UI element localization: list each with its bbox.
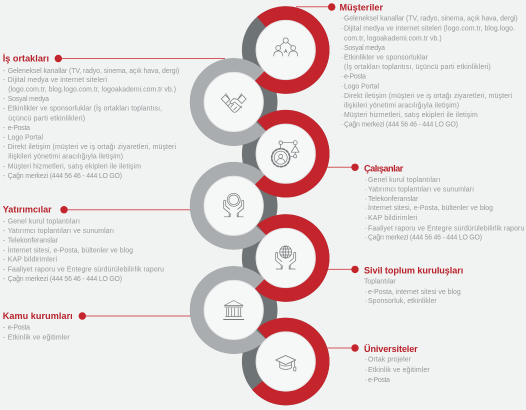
list: - (3, 238, 5, 245)
list: e-Posta (344, 74, 366, 81)
list: Telekonferanslar (368, 196, 419, 203)
list: Etkinlikler ve sponsorluklar (344, 55, 429, 62)
list: Çağrı merkezi (444 56 46 - 444 LO GO) (8, 173, 122, 180)
list: Geleneksel kanallar (TV, radyo, sinema, açık hava, dergi) (344, 16, 518, 23)
icon: government building (224, 300, 244, 320)
list (3, 325, 70, 342)
list: ilişkileri yönetimi aracılığıyla iletişim) (8, 154, 123, 161)
list: · (365, 215, 367, 222)
list: - (3, 125, 5, 132)
list: Etkinlikler ve sponsorluklar (İş ortakları toplantısı, (8, 104, 162, 113)
list (365, 177, 524, 242)
list: İnternet sitesi, e-Posta, bültenler ve blog (368, 203, 493, 212)
heading: İş ortakları (3, 54, 49, 64)
list: - (3, 267, 5, 274)
list: Logo Portal (8, 135, 43, 142)
list: Yatırımcı toplantıları ve sunumları (8, 228, 114, 235)
list: İnternet sitesi, e-Posta, bültenler ve blog (8, 245, 133, 254)
list: · (365, 377, 367, 384)
list: - (3, 325, 5, 332)
list (341, 16, 518, 129)
list: - (3, 173, 5, 180)
list: - (3, 247, 5, 254)
list: Ortak projeler (368, 357, 412, 364)
list: Çağrı merkezi (444 56 46 - 444 LO GO) (368, 235, 482, 242)
connector lines (58, 7, 355, 348)
icon: graduation cap (276, 356, 296, 371)
list: · (341, 74, 343, 81)
marker dot (328, 3, 335, 11)
list: - (3, 257, 5, 264)
list: Toplantılar (364, 279, 396, 286)
list: - (3, 144, 5, 151)
list: · (341, 16, 343, 23)
list: · (341, 112, 343, 119)
list: (İş ortakları toplantısı, üçüncü parti etkinlikleri) (344, 62, 491, 71)
list: Sosyal medya (8, 96, 49, 103)
icon: hands holding globe (276, 246, 296, 269)
list: üçüncü parti etkinlikleri) (8, 115, 85, 122)
marker dot (351, 164, 359, 171)
list: · (365, 225, 367, 232)
list: · (341, 55, 343, 62)
heading: Müşteriler (340, 2, 383, 12)
list: Çağrı merkezi (444 56 46 - 444 LO GO) (344, 122, 458, 129)
list: - (3, 335, 5, 342)
list: e-Posta (368, 377, 390, 384)
heading: Sivil toplum kuruluşları (364, 266, 463, 276)
heading: Yatırımcılar (3, 204, 52, 214)
list: Dijital medya ve internet siteleri (logo.com.tr, blog.logo. (344, 26, 515, 33)
stakeholder: Kamu kurumları (3, 311, 86, 342)
list (3, 68, 179, 180)
list: · (365, 205, 367, 212)
marker dot (60, 206, 68, 213)
list: Müşteri hizmetleri, satış ekipleri ile iletişim (344, 112, 478, 119)
list: · (365, 186, 367, 193)
icon: customers group (274, 38, 298, 56)
list: Etkinlik ve eğitimler (368, 367, 430, 374)
list: · (341, 93, 343, 100)
list (365, 357, 430, 384)
list: Dijital medya ve internet siteleri (8, 77, 107, 84)
list: Genel kurul toplantıları (8, 219, 80, 226)
list: - (3, 106, 5, 113)
stakeholder: Sivil toplum kuruluşları (351, 266, 463, 305)
list: Direkt iletişim (müşteri ve iş ortağı ziyaretleri, müşteri (8, 144, 176, 151)
stakeholder: Yatırımcılar (3, 204, 164, 283)
red ring arcs (258, 13, 322, 398)
heading: Çalışanlar (364, 164, 404, 174)
list: e-Posta, internet sitesi ve blog (368, 289, 461, 296)
list: · (365, 298, 367, 305)
list: Etkinlik ve eğitimler (8, 335, 70, 342)
list: Sponsorluk, etkinlikler (368, 298, 437, 305)
list: (logo.com.tr, blog.logo.com.tr, logoakademi.com.tr vb.) (8, 87, 176, 94)
white circle centres (204, 20, 315, 391)
stakeholder: Müşteriler (328, 2, 518, 129)
list: e-Posta (8, 325, 30, 332)
list: Telekonferanslar (8, 238, 59, 245)
list: Müşteri hizmetleri, satış ekipleri ile iletişim (8, 164, 141, 171)
marker dot (351, 266, 359, 273)
list: - (3, 219, 5, 226)
list: · (341, 45, 343, 52)
list: · (365, 357, 367, 364)
list (3, 219, 164, 283)
list: - (3, 77, 5, 84)
list: Faaliyet raporu ve Entegre sürdürülebilirlik raporu (8, 267, 164, 274)
list: Sosyal medya (344, 45, 385, 52)
list: · (365, 367, 367, 374)
stakeholder: İş ortakları (3, 54, 179, 180)
list: Genel kurul toplantıları (368, 177, 440, 184)
stakeholder: Çalışanlar (351, 164, 524, 242)
list: Direkt iletişim (müşteri ve iş ortağı ziyaretleri, müşteri (344, 93, 512, 100)
heading: Kamu kurumları (3, 311, 73, 321)
list: Geleneksel kanallar (TV, radyo, sinema, açık hava, dergi) (8, 68, 179, 75)
list: · (341, 83, 343, 90)
list: · (341, 122, 343, 129)
list: Çağrı merkezi (444 56 46 - 444 LO GO) (8, 276, 122, 283)
list: - (3, 164, 5, 171)
marker dot (55, 55, 62, 62)
list: Logo Portal (344, 83, 379, 90)
dark under-rings (197, 13, 322, 398)
list: - (3, 68, 5, 75)
list: · (365, 196, 367, 203)
list (364, 279, 461, 305)
list: Faaliyet raporu ve Entegre sürdürülebilirlik raporu (368, 225, 524, 232)
list: Yatırımcı toplantıları ve sunumları (368, 186, 474, 193)
list: - (3, 96, 5, 103)
grey ring arcs (197, 65, 261, 347)
list: ilişkileri yönetimi aracılığıyla iletişim) (344, 103, 459, 110)
list: · (365, 177, 367, 184)
marker dot (79, 312, 86, 320)
icon: handshake (221, 94, 246, 112)
marker dot (351, 344, 359, 352)
list: e-Posta (8, 125, 30, 132)
list: · (365, 289, 367, 296)
icon: gear with person and org chart (272, 141, 299, 167)
list: KAP bildirimleri (8, 257, 57, 264)
list: - (3, 135, 5, 142)
list: - (3, 228, 5, 235)
list: KAP bildirimleri (368, 215, 418, 222)
stakeholder: Üniversiteler (351, 344, 430, 384)
list: · (365, 235, 367, 242)
list: - (3, 276, 5, 283)
heading: Üniversiteler (364, 344, 418, 354)
list: · (341, 26, 343, 33)
icon: hands holding coin (224, 193, 244, 217)
list: com.tr, logoakademi.com.tr vb.) (344, 36, 442, 43)
